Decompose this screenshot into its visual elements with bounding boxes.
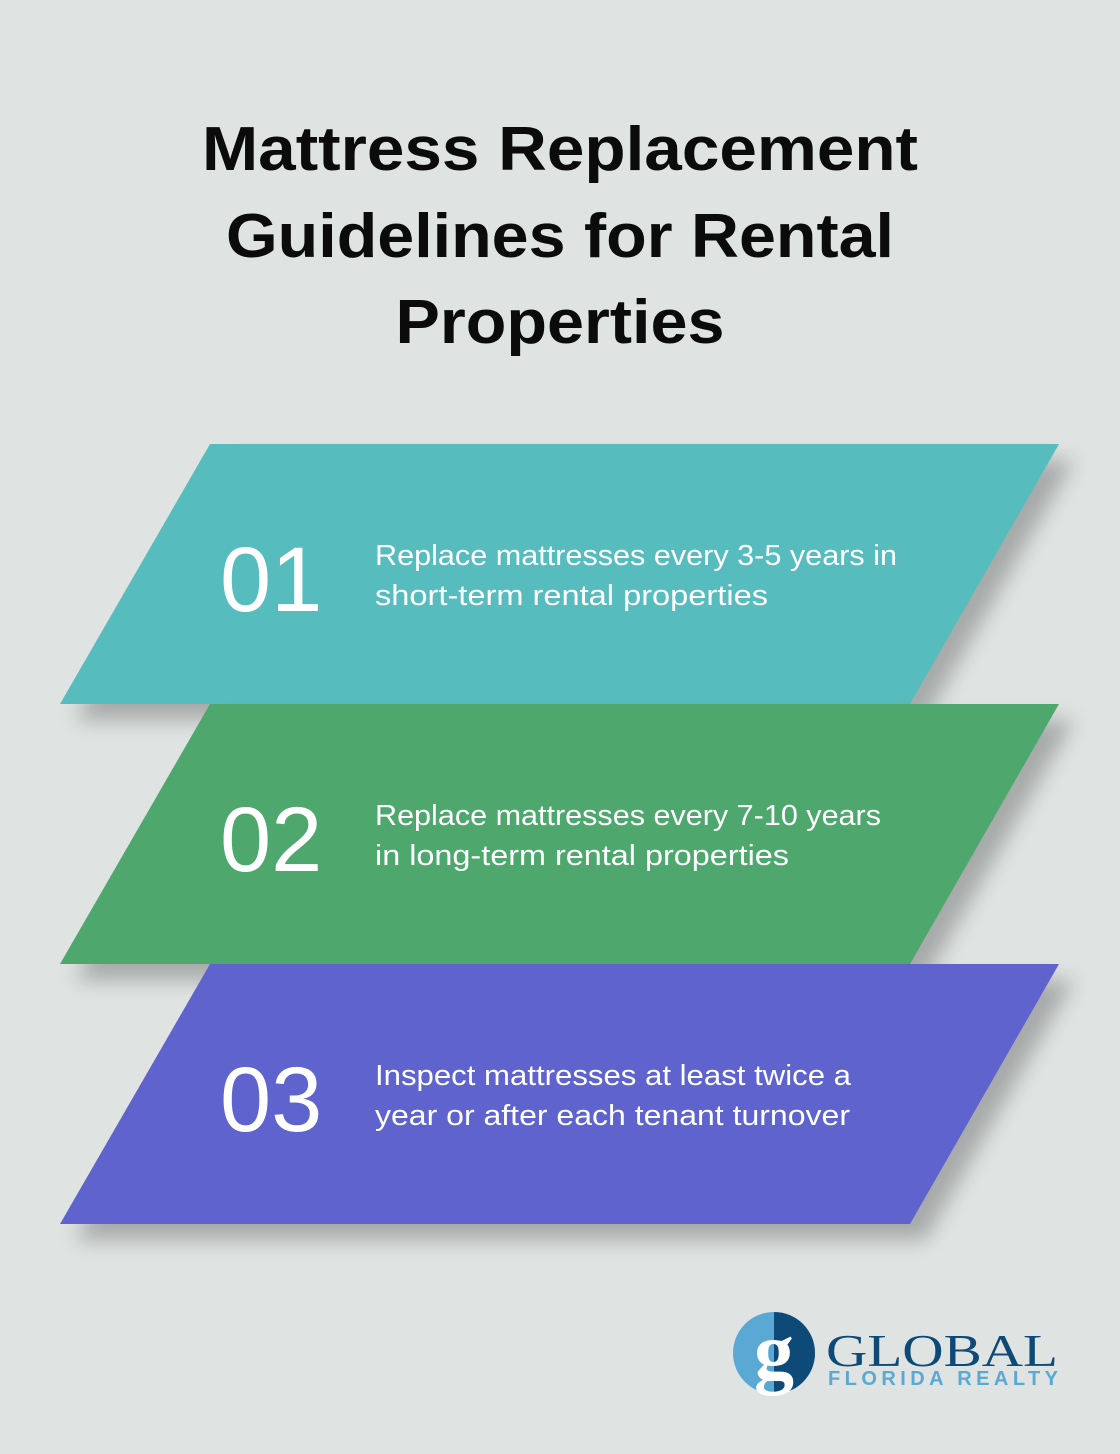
logo: FLORIDA REALTY [828,1368,1059,1390]
step 1 [60,444,1074,720]
step 3: year or after each tenant turnover [375,1100,850,1132]
step 2: 02 [220,789,322,891]
title: Guidelines for Rental [226,202,894,271]
step 2 [60,704,1074,980]
step 2: Replace mattresses every 7-10 years [375,800,881,832]
step 3 [60,964,1074,1240]
logo [733,1308,1059,1396]
logo: g [754,1308,794,1396]
step 2: in long-term rental properties [375,840,789,872]
step 1: 01 [220,529,322,631]
title: Mattress Replacement [202,115,918,184]
step 1: short-term rental properties [375,580,768,612]
step 3: 03 [220,1049,322,1151]
logo: GLOBAL [826,1325,1058,1376]
step 1: Replace mattresses every 3-5 years in [375,540,897,572]
title [202,115,918,357]
step 3: Inspect mattresses at least twice a [375,1060,852,1092]
title: Properties [396,288,724,357]
